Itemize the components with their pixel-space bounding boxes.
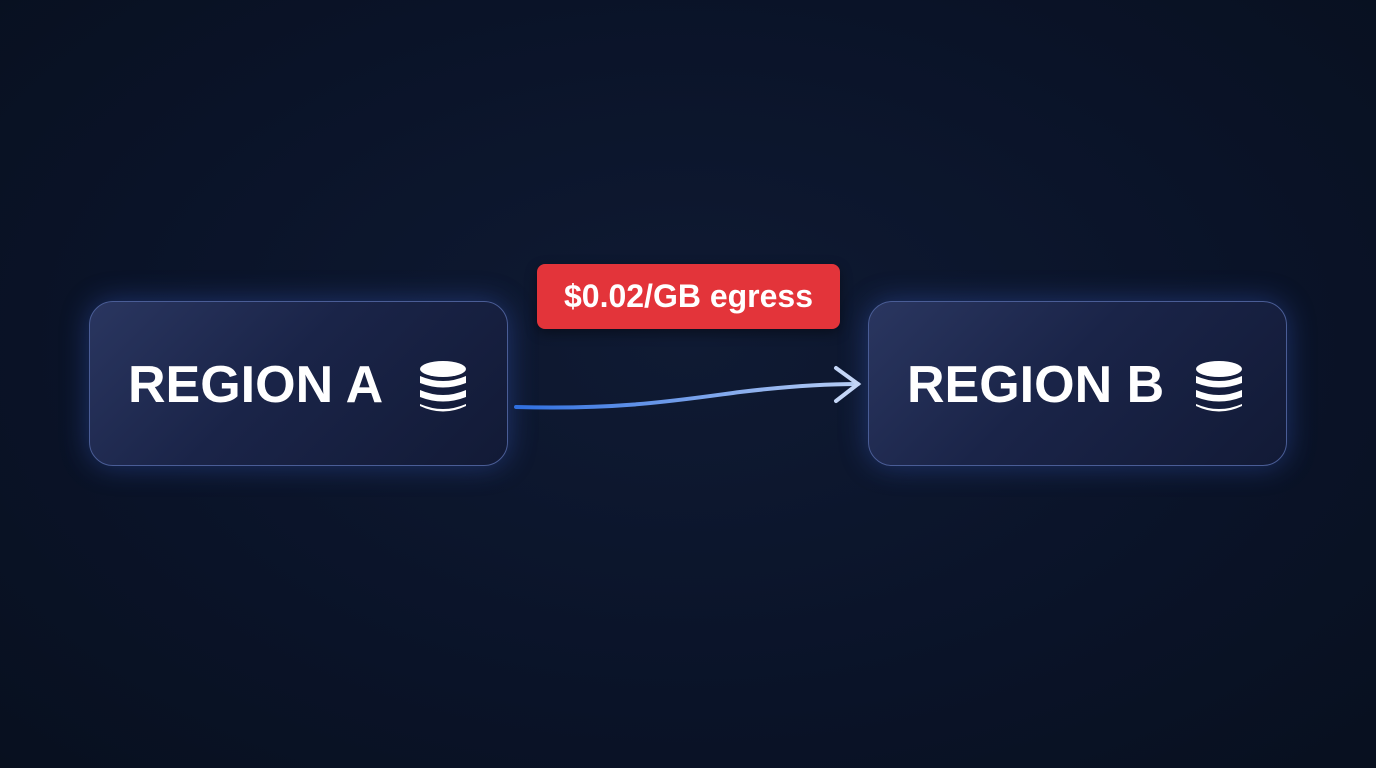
panel: region A xyxy=(89,301,508,466)
callout: egress cost xyxy=(537,264,840,329)
panel: region B xyxy=(868,301,1287,466)
icon: database A xyxy=(420,361,466,412)
callout: egress cost: $0.02/GB egress xyxy=(564,278,813,314)
icon: database B xyxy=(1196,361,1242,412)
heading: region A: REGION A xyxy=(128,356,383,414)
heading: region B: REGION B xyxy=(907,356,1164,414)
